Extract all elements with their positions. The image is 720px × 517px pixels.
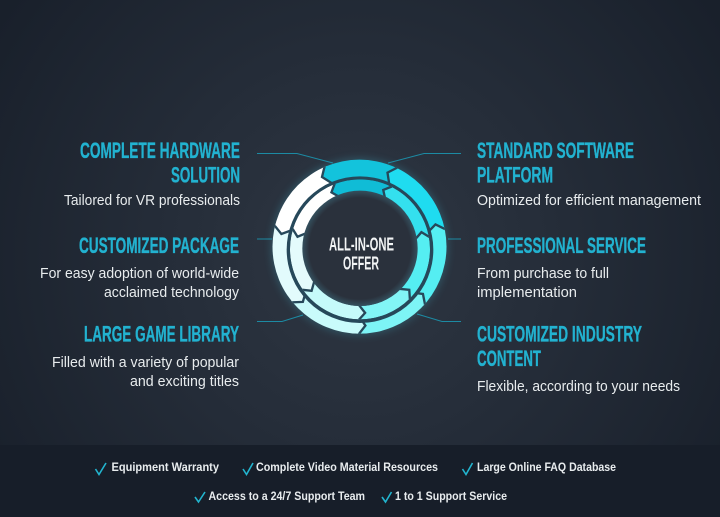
centre label: ALL-IN-ONE [329, 234, 394, 254]
text block: standard software platform: PLATFORM [477, 162, 553, 188]
text block: professional service: implementation [477, 284, 577, 301]
footer checklist: Access to a 24/7 Support Team [208, 489, 365, 503]
text block: large game library: Filled with a variety of popular [52, 354, 239, 371]
centre disc [302, 191, 418, 306]
text block: complete hardware solution [64, 138, 240, 209]
inner ring segments [290, 180, 430, 320]
text block: customized industry content: CONTENT [477, 346, 541, 371]
text block: large game library: and exciting titles [130, 373, 239, 390]
dark separator ring [287, 176, 433, 323]
text block: professional service: From purchase to full [477, 265, 609, 282]
text block: large game library [52, 322, 239, 390]
text block: professional service [477, 233, 646, 301]
outer ring segments [272, 160, 446, 334]
footer band [0, 445, 720, 517]
footer checklist: Large Online FAQ Database [477, 460, 616, 474]
text block: standard software platform [477, 138, 702, 209]
centre label [329, 234, 394, 274]
text block: customized package: CUSTOMIZED PACKAGE [79, 233, 239, 258]
text block: customized package [40, 233, 239, 301]
text block: customized industry content [477, 322, 680, 395]
text block: customized package: For easy adoption of world-wide [40, 265, 239, 282]
text block: complete hardware solution: Tailored for VR professionals [64, 192, 240, 209]
text block: standard software platform: Optimized for efficient management [477, 192, 702, 209]
centre label: OFFER [343, 254, 379, 274]
connector lines [257, 154, 461, 322]
footer checklist: Complete Video Material Resources [256, 460, 438, 474]
text block: large game library: LARGE GAME LIBRARY [84, 322, 239, 346]
text block: complete hardware solution: COMPLETE HARDWARE [80, 138, 240, 163]
text block: complete hardware solution: SOLUTION [171, 162, 240, 188]
text block: customized package: acclaimed technology [104, 284, 239, 301]
text block: customized industry content: Flexible, according to your needs [477, 378, 680, 395]
footer checklist: 1 to 1 Support Service [395, 489, 507, 503]
cycle ring diagram [268, 156, 450, 338]
footer checklist: Equipment Warranty [112, 460, 219, 474]
footer checklist [96, 460, 616, 503]
